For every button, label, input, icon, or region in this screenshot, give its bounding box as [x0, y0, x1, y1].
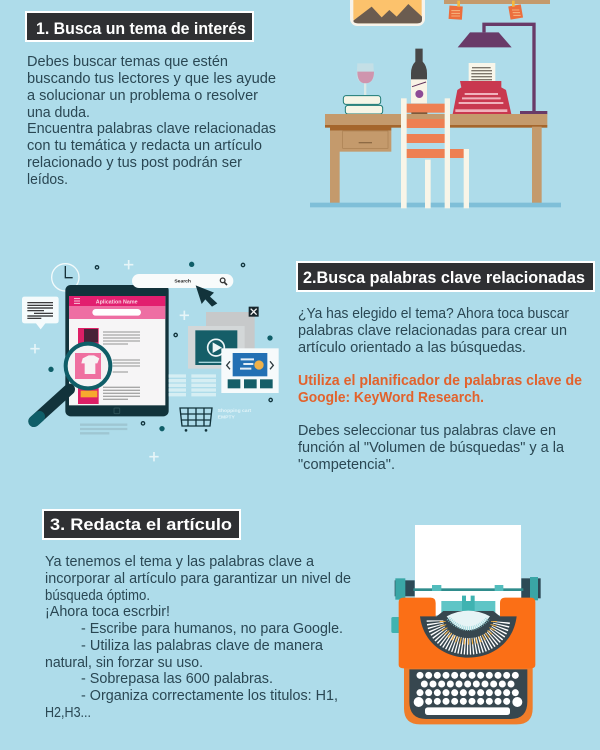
- icon: shelf with notes: [444, 0, 550, 20]
- decorative text rows: [169, 376, 216, 395]
- icon: roller bar: [413, 585, 523, 591]
- text block: step 2 intro: [298, 306, 569, 356]
- text block: step 3: - Escribe para humanos, no para Google.: [81, 621, 343, 637]
- heading: step 2: 2.Busca palabras clave relacionadas: [303, 268, 585, 287]
- floor line: [310, 203, 561, 207]
- text block: step 1: con tu temática y redacta un artículo: [27, 138, 262, 154]
- heading: step 2: [297, 262, 594, 291]
- text block: step 3: Ya tenemos el tema y las palabras clave a: [45, 554, 315, 570]
- icon: framed picture: [350, 0, 425, 26]
- icon: tablet: Aplication Name: [96, 299, 138, 305]
- text block: step 3: - Organiza correctamente los titulos: H1,: [81, 688, 338, 704]
- icon: books: [343, 96, 383, 114]
- text block: step 3: - Sobrepasa las 600 palabras.: [81, 671, 273, 687]
- icon: type bars: [420, 611, 517, 658]
- icon: cursor arrow: [196, 285, 217, 307]
- illustration: writing desk: [310, 0, 561, 208]
- illustration: orange typewriter: [391, 525, 541, 724]
- text block: step 2 intro: ¿Ya has elegido el tema? Ahora toca buscar: [298, 306, 569, 322]
- text block: step 2 intro: artículo orientado a las búsquedas.: [298, 340, 526, 356]
- text block: step 2 intro: palabras clave relacionadas para crear un: [298, 323, 567, 339]
- icon: wine glass: [357, 63, 374, 95]
- text block: step 3: búsqueda óptimo.: [45, 588, 150, 604]
- text block: step 2 detail: "competencia".: [298, 457, 395, 473]
- text block: step 3: natural, sin forzar su uso.: [45, 655, 203, 671]
- icon: tablet: [65, 285, 169, 416]
- text block: step 2 detail: [298, 423, 565, 473]
- illustration: tablet search: [22, 260, 279, 461]
- text block: step 1: una duda.: [27, 105, 90, 121]
- icon: wine bottle: [411, 49, 427, 103]
- text block: step 2 detail: función al "Volumen de búsquedas" y a la: [298, 440, 565, 456]
- heading: step 3: 3. Redacta el artículo: [50, 515, 232, 534]
- text block: step 3: H2,H3...: [45, 705, 91, 721]
- text block: step 1: buscando tus lectores y que les ayude: [27, 71, 276, 87]
- label: shopping cart: EMPTY: [218, 415, 236, 421]
- icon: close window: [206, 307, 259, 352]
- text block: step 3: [45, 554, 351, 721]
- icon: search bar: Search: [174, 279, 191, 285]
- icon: paper sheet: [415, 525, 521, 615]
- text block: step 1: [27, 54, 276, 188]
- callout: keyword planner: Google: KeyWord Research.: [298, 390, 484, 406]
- text block: step 1: relacionado y tus post podrán ser: [27, 155, 242, 171]
- icon: roller knobs: [391, 577, 541, 633]
- icon: chair: [401, 98, 469, 208]
- icon: magnifying glass: [34, 344, 110, 421]
- heading: step 1: 1. Busca un tema de interés: [36, 19, 246, 38]
- callout: keyword planner: Utiliza el planificador de palabras clave de: [298, 373, 582, 389]
- icon: small typewriter: [453, 63, 511, 114]
- icon: gallery card: [221, 348, 279, 393]
- label: shopping cart: Shopping cart: [218, 408, 251, 414]
- icon: video player: [188, 326, 245, 369]
- icon: speech bubble: [22, 297, 59, 329]
- icon: desk: [325, 114, 547, 206]
- icon: lamp: [458, 24, 547, 114]
- text block: step 3: ¡Ahora toca escrbir!: [45, 604, 170, 620]
- text block: step 1: Debes buscar temas que estén: [27, 54, 228, 70]
- icon: search bar: [132, 274, 233, 288]
- icon: typewriter body: [399, 596, 535, 724]
- callout: keyword planner: [298, 373, 582, 406]
- text block: step 3: incorporar al artículo para garantizar un nivel de: [45, 571, 351, 587]
- heading: step 3: [43, 510, 240, 539]
- heading: step 1: [26, 12, 253, 41]
- icon: keyboard: [409, 669, 527, 719]
- text block: step 1: Encuentra palabras clave relacionadas: [27, 121, 276, 137]
- text block: step 3: - Utiliza las palabras clave de manera: [81, 638, 324, 654]
- decorative sparkles and dots: [30, 260, 189, 461]
- icon: clock: [52, 264, 79, 291]
- text block: step 2 detail: Debes seleccionar tus palabras clave en: [298, 423, 556, 439]
- text block: step 1: a solucionar un problema o resolver: [27, 88, 258, 104]
- icon: shopping cart: [180, 408, 212, 432]
- text block: step 1: leídos.: [27, 172, 68, 188]
